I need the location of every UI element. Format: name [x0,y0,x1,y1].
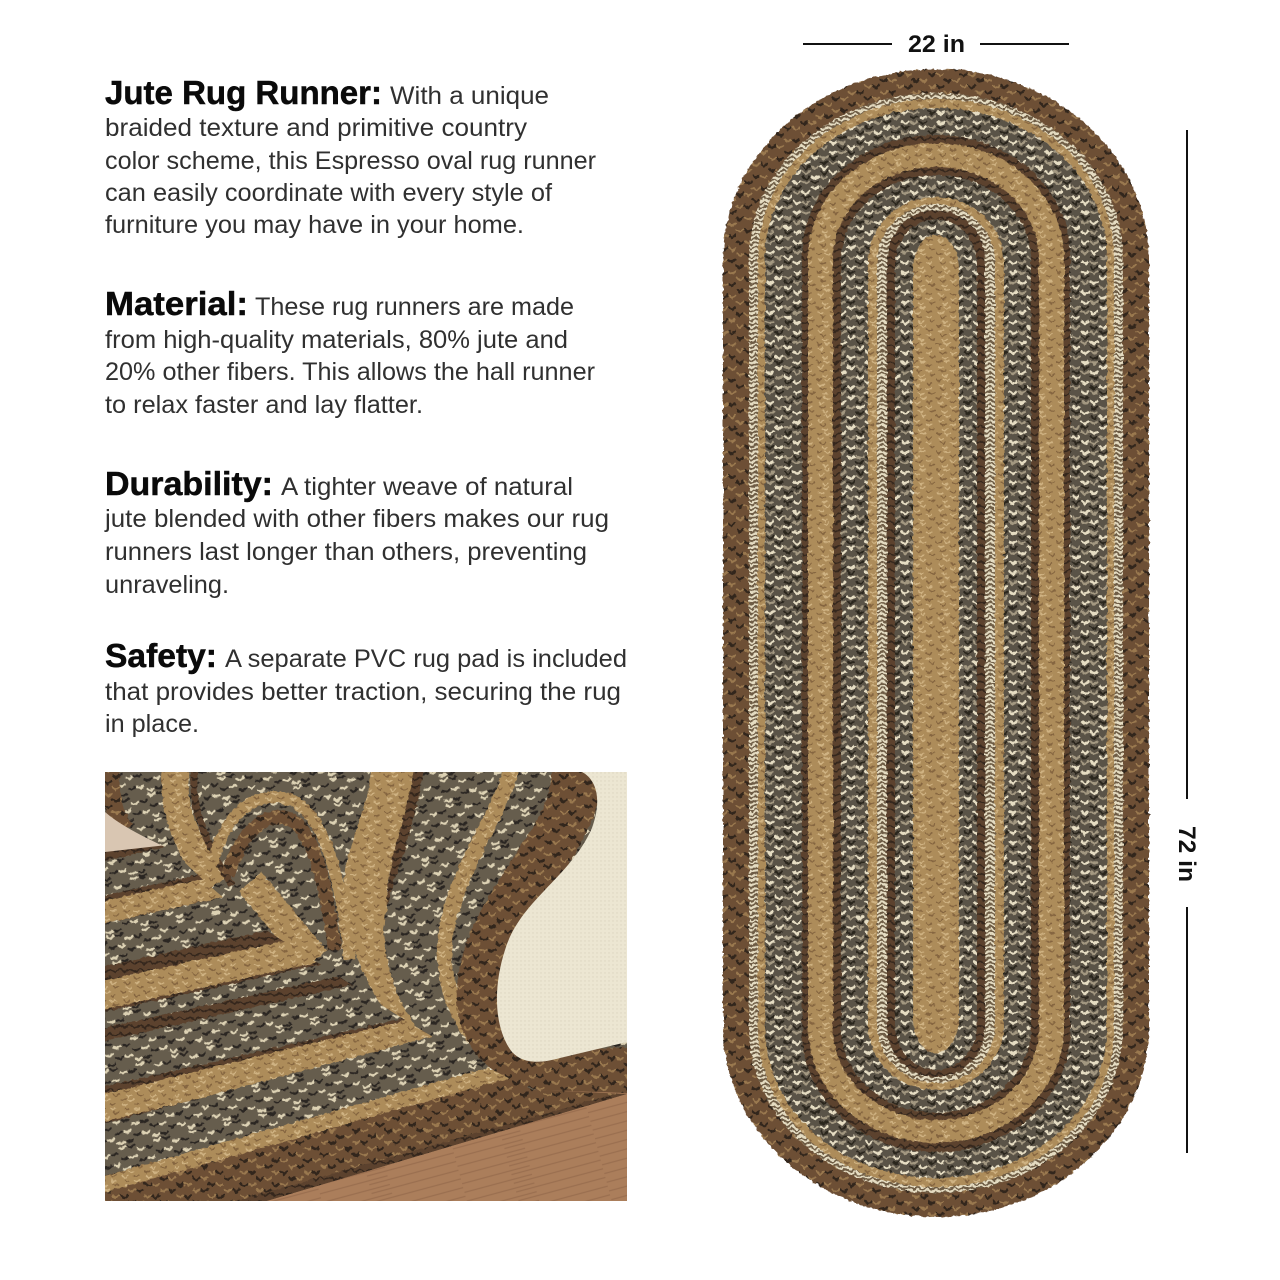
wide tan band [808,143,1064,1143]
outer brown band [723,69,1149,1217]
cream band [749,93,1123,1193]
photo: rolled rug corner showing pad [105,772,627,1201]
wide grey band [383,853,450,1042]
text block: material: Material: [105,285,248,322]
wood floor [267,1094,627,1201]
concentric inner arcs [212,797,350,960]
braided oval rug runner [723,69,1149,1217]
text block: jute rug runner: Jute Rug Runner: [105,74,382,111]
thin tan and cream band [445,760,512,1075]
outer brown band [482,760,640,1073]
left arm of oval bands [111,760,125,830]
text block: jute rug runner [105,74,596,239]
dark brown band [802,135,1070,1152]
wide grey band [765,108,1107,1178]
flat rug on floor [105,846,626,1201]
thin tan band [758,99,1114,1187]
text block: jute rug runner: can easily coordinate with every style of [105,179,552,207]
text block: material: from high-quality materials, 80% jute and [105,326,568,354]
text block: safety: Safety: [105,637,217,674]
text block: material: 20% other fibers. This allows the hall runner [105,358,595,386]
text block: material: These rug runners are made [255,293,574,321]
centre grey band [895,219,977,1070]
text block: jute rug runner: braided texture and primitive country [105,114,528,142]
back floor [105,812,162,852]
text block: safety [105,637,627,738]
text block: durability [104,465,609,599]
inner brown band [887,210,985,1077]
text block: durability: jute blended with other fibers makes our rug [104,505,609,533]
text block: material [105,285,595,419]
rolled rug flap [105,772,627,1093]
dimension: width 22 in: 22 in [908,31,965,58]
text block: material: to relax faster and lay flatter. [105,391,423,419]
rug pad [490,772,627,1070]
wide tan band [365,760,430,1040]
text block: durability: Durability: [105,465,273,502]
text block: safety: that provides better traction, securing the rug [105,678,621,706]
inner grey band [841,175,1031,1113]
text block: safety: in place. [105,710,199,738]
text block: durability: runners last longer than others, preventing [105,538,587,566]
text block: jute rug runner: With a unique [390,82,549,110]
text block: jute rug runner: color scheme, this Espresso oval rug runner [105,147,596,175]
text block: durability: A tighter weave of natural [281,473,573,501]
inner tan band [868,197,1004,1090]
text block: safety: A separate PVC rug pad is included [225,645,627,673]
centre tan strip [913,235,959,1053]
infographic canvas [104,34,1196,1218]
inner cream band [877,204,995,1083]
dimension: length 72 in: 72 in [1173,826,1200,882]
inner dark band [833,167,1039,1120]
text block: durability: unraveling. [105,571,229,599]
text block: jute rug runner: furniture you may have in your home. [105,211,524,239]
